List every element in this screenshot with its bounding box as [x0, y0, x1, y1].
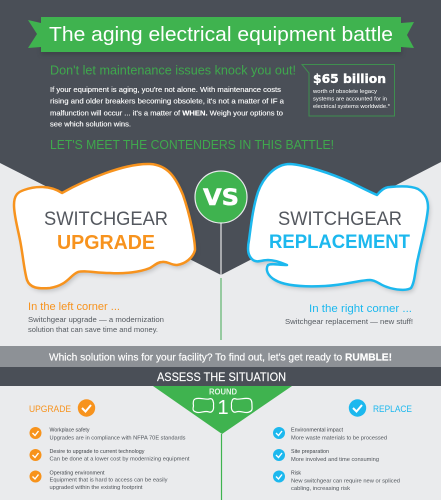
item: operating environment	[30, 470, 168, 491]
intro paragraph: see which solution wins.	[50, 120, 131, 128]
item: workplace safety: Upgrades are in compliance with NFPA 70E standards	[50, 436, 186, 442]
title banner: The aging electrical equipment battle	[49, 23, 393, 46]
item: risk: cabling, increasing risk	[291, 486, 350, 492]
section header: ASSESS THE SITUATION	[157, 370, 286, 384]
dark header background	[0, 0, 441, 275]
center divider line	[220, 222, 222, 340]
left corner text: In the left corner ...	[28, 301, 120, 313]
item: desire to upgrade	[30, 449, 190, 462]
right corner text: In the right corner ...	[309, 303, 412, 315]
stat callout: systems are accounted for in	[313, 96, 387, 102]
right corner text: Switchgear replacement — new stuff!	[285, 317, 413, 326]
item: desire to upgrade: Can be done at a lower cost by modernizing equipment	[50, 456, 190, 462]
glove: upgrade: SWITCHGEAR	[44, 208, 168, 230]
glove: upgrade: UPGRADE	[57, 232, 155, 254]
round badge: 1	[217, 397, 229, 419]
intro paragraph: rising and older breakers becoming obsolete, it's not a matter of IF a	[50, 96, 285, 106]
subheading: Don't let maintenance issues knock you out!	[50, 62, 296, 78]
rumble band	[0, 346, 441, 367]
item: operating environment: upgraded within the existing footprint	[50, 485, 143, 491]
left corner text: solution that can save time and money.	[28, 325, 158, 334]
item: risk	[273, 470, 400, 492]
glove: replacement: SWITCHGEAR	[278, 208, 402, 230]
intro paragraph: If your equipment is aging, you're not alone. With maintenance costs	[50, 85, 281, 94]
contenders heading: LET'S MEET THE CONTENDERS IN THIS BATTLE!	[50, 137, 334, 152]
title banner	[28, 17, 414, 55]
intro paragraph	[50, 85, 285, 128]
left corner text	[28, 301, 164, 334]
item: site preparation	[273, 449, 379, 463]
item: site preparation: More involved and time consuming	[291, 457, 379, 463]
right corner text	[285, 303, 413, 326]
item: workplace safety: Workplace safety	[50, 428, 90, 434]
glove: replacement: REPLACEMENT	[269, 231, 410, 253]
upgrade column header: UPGRADE	[29, 404, 71, 415]
upgrade column header	[29, 399, 95, 417]
rumble band: Which solution wins for your facility? To find out, let's get ready to RUMBLE!	[49, 352, 392, 364]
item: desire to upgrade: Desire to upgrade to current technology	[50, 449, 145, 455]
item: risk: Risk	[291, 470, 301, 476]
upgrade list	[30, 427, 190, 491]
glove: upgrade	[14, 164, 197, 291]
round badge	[153, 386, 292, 434]
item: risk: New switchgear can require new or spliced	[291, 478, 400, 484]
left corner text: Switchgear upgrade — a modernization	[28, 315, 164, 324]
VS badge	[195, 171, 247, 223]
item: operating environment: Operating environment	[50, 470, 105, 476]
stat callout: worth of obsolete legacy	[313, 89, 377, 95]
replace column header: REPLACE	[373, 404, 412, 415]
item: operating environment: Equipment that is hard to access can be easily	[50, 478, 168, 484]
item: site preparation: Site preparation	[291, 449, 329, 455]
item: environmental impact: Environmental impact	[291, 428, 343, 434]
item: environmental impact: More waste materials to be processed	[291, 436, 387, 442]
stat callout: electrical systems worldwide.*	[313, 104, 390, 110]
replace column header	[349, 399, 412, 417]
item: workplace safety	[30, 427, 186, 442]
replace list	[273, 427, 400, 492]
lower divider line	[220, 434, 222, 500]
intro paragraph: malfunction will occur ... it's a matter of WHEN. Weigh your options to	[50, 108, 283, 118]
VS badge: VS	[203, 186, 239, 211]
item: environmental impact	[273, 427, 387, 442]
section header	[0, 367, 441, 386]
glove: replacement	[248, 164, 430, 293]
round badge: ROUND	[209, 388, 237, 396]
stat callout	[302, 64, 394, 116]
stat callout: $65 billion	[313, 72, 386, 86]
